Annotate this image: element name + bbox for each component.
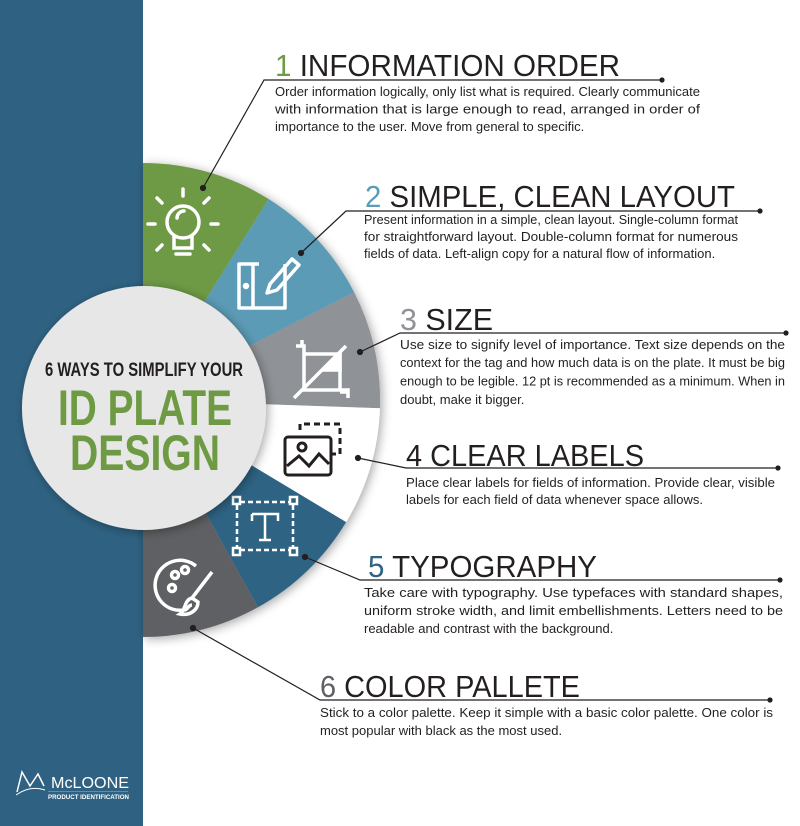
segment 3 gray <box>143 292 380 408</box>
item 1: with information that is large enough to read, arranged in order of <box>274 102 700 116</box>
item 6: most popular with black as the most used. <box>320 723 562 738</box>
item 6: Stick to a color palette. Keep it simple with a basic color palette. One color is <box>320 705 774 720</box>
item 3: 3 SIZE <box>400 302 493 337</box>
item 4 <box>406 438 775 507</box>
item 4: Place clear labels for fields of information. Provide clear, visible <box>406 475 775 490</box>
item 2: for straightforward layout. Double-column format for numerous <box>364 229 739 244</box>
item 6 <box>320 669 774 738</box>
item 1: importance to the user. Move from general to specific. <box>275 119 584 134</box>
logo <box>16 772 129 801</box>
logo: PRODUCT IDENTIFICATION <box>48 795 129 801</box>
logo: McLOONE <box>51 775 129 792</box>
item 2: Present information in a simple, clean layout. Single-column format <box>364 212 738 227</box>
item 3: doubt, make it bigger. <box>400 392 524 407</box>
leader lines <box>190 78 788 702</box>
item 3: context for the tag and how much data is on the plate. It must be big <box>400 355 785 370</box>
segment 4 white <box>143 400 380 522</box>
item 5: 5 TYPOGRAPHY <box>368 549 597 584</box>
item 1: 1 INFORMATION ORDER <box>275 48 620 83</box>
segment 1 green <box>143 163 269 400</box>
icon: light bulb <box>148 189 218 254</box>
item 1 <box>274 48 700 134</box>
icon: crop <box>294 340 348 398</box>
icon: T text box <box>233 497 297 555</box>
item 5 <box>364 549 783 636</box>
center circle: DESIGN <box>70 425 220 481</box>
item 5: readable and contrast with the background. <box>364 621 613 636</box>
title: 6 WAYS TO SIMPLIFY YOUR <box>45 360 243 381</box>
icon: palette <box>155 560 212 614</box>
left band <box>0 0 143 826</box>
item 1: Order information logically, only list what is required. Clearly communicate <box>275 84 700 99</box>
icon: image <box>285 424 340 475</box>
wheel <box>143 163 380 637</box>
item 5: Take care with typography. Use typefaces with standard shapes, <box>364 585 783 600</box>
segment 6 dark gray <box>143 400 258 637</box>
center circle: ID PLATE <box>58 380 232 436</box>
item 2 <box>364 179 739 261</box>
icon: tablet with pen <box>239 259 299 308</box>
segment 2 blue <box>143 199 354 400</box>
center circle <box>22 286 266 530</box>
item 3: Use size to signify level of importance. Text size depends on the <box>400 337 785 352</box>
item 2: fields of data. Left-align copy for a natural flow of information. <box>364 246 715 261</box>
item 6: 6 COLOR PALLETE <box>320 669 580 704</box>
segment 5 dark blue <box>143 400 346 607</box>
item 4: 4 CLEAR LABELS <box>406 438 644 473</box>
item 3: enough to be legible. 12 pt is recommended as a minimum. When in <box>400 374 785 388</box>
item 4: labels for each field of data whenever space allows. <box>406 492 703 507</box>
item 3 <box>400 302 785 407</box>
item 2: 2 SIMPLE, CLEAN LAYOUT <box>365 179 735 214</box>
item 5: uniform stroke width, and limit embellishments. Letters need to be <box>364 603 783 618</box>
